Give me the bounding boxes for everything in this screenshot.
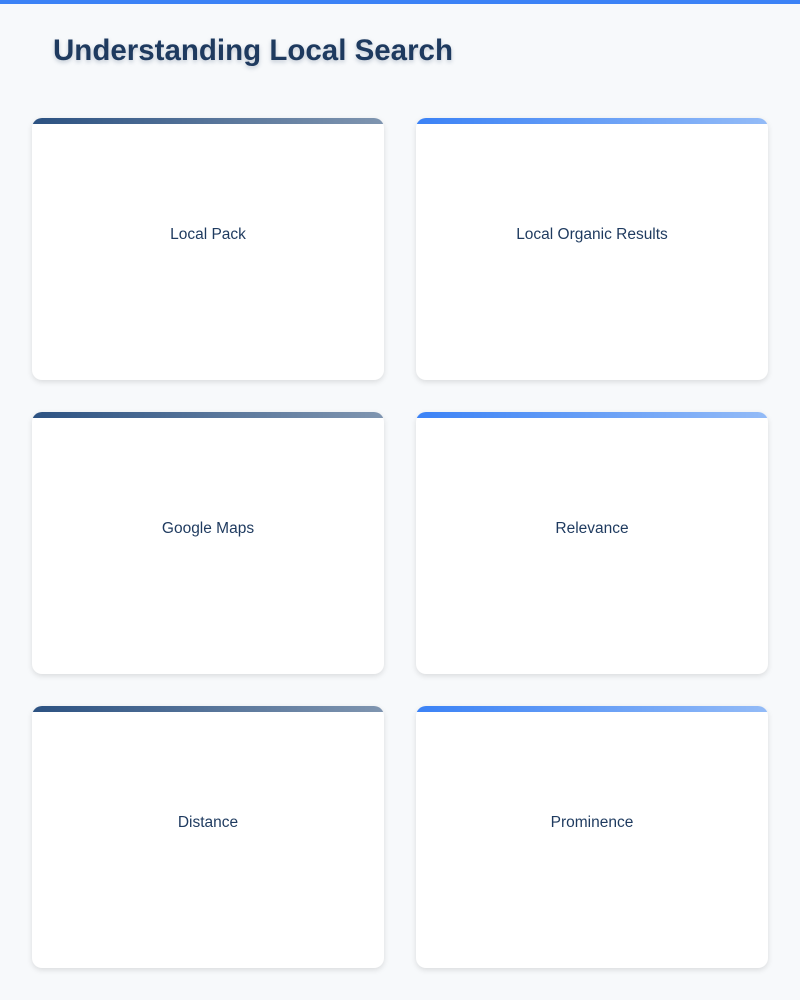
panel: local organic results <box>416 118 768 380</box>
panel: google maps <box>32 412 384 674</box>
panel: prominence <box>416 706 768 968</box>
panel: relevance <box>416 412 768 674</box>
panel: prominence: Prominence <box>551 814 633 831</box>
panel: relevance: Relevance <box>555 520 629 537</box>
panel: local pack: Local Pack <box>170 226 246 243</box>
panel: distance: Distance <box>178 814 238 831</box>
title: Understanding Local Search <box>53 34 453 67</box>
panel: local organic results: Local Organic Results <box>516 226 668 243</box>
panel: local pack <box>32 118 384 380</box>
panel: google maps: Google Maps <box>162 520 254 537</box>
panel: distance <box>32 706 384 968</box>
